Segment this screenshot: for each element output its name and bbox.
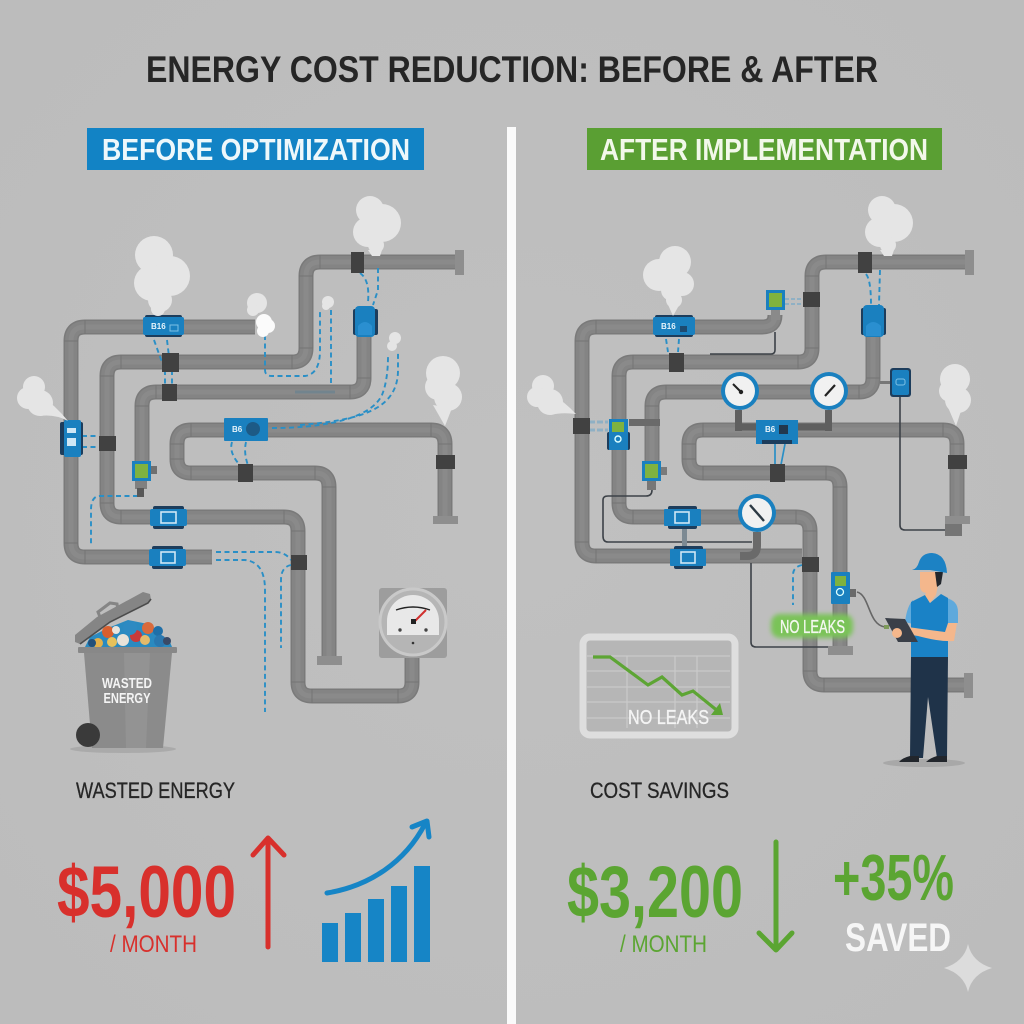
- stat: before cost: / MONTH: [110, 931, 197, 958]
- left sleeve: [905, 600, 913, 624]
- gauge: pressure one: [721, 372, 829, 431]
- leak stains and dashed leak lines: before: [82, 268, 398, 712]
- cables: after: [603, 332, 945, 647]
- meter: centre with dial: B6: [232, 425, 243, 434]
- smoke: before: [17, 196, 462, 426]
- head and neck: [920, 572, 938, 603]
- heading: after implementation: AFTER IMPLEMENTATION: [600, 133, 928, 167]
- hard hat: [912, 553, 947, 573]
- icon: sparkle: [944, 944, 992, 992]
- icon: gas meter high reading: [379, 588, 447, 658]
- icon: trash can of wasted energy: WASTED: [102, 675, 152, 692]
- connector between meters: [682, 529, 687, 546]
- line chart: falling cost: NO LEAKS: [628, 707, 709, 729]
- panel divider: [507, 127, 516, 1024]
- pipes: before: [64, 250, 464, 703]
- stat: percent saved: SAVED: [845, 916, 951, 960]
- dashed lines: after: [589, 270, 880, 605]
- label: wasted energy: WASTED ENERGY: [76, 778, 235, 803]
- callout: no leaks glow: NO LEAKS: [780, 617, 845, 637]
- arrow: cost down: [759, 842, 792, 950]
- meter: top blue: [143, 315, 184, 337]
- trash contents: [85, 620, 172, 648]
- torso: [911, 594, 948, 657]
- arrow: cost up: [253, 838, 284, 947]
- meter: middle: [150, 506, 187, 529]
- stat: percent saved: +35%: [833, 841, 954, 914]
- gauge: pressure two: [810, 372, 848, 431]
- title: ENERGY COST REDUCTION: BEFORE & AFTER: [146, 49, 878, 90]
- clamps: before: [99, 252, 455, 570]
- bar chart: rising cost: [322, 821, 430, 962]
- stat: after cost: / MONTH: [620, 931, 707, 958]
- stat: before cost: $5,000: [57, 852, 236, 933]
- trash lid: [75, 592, 151, 644]
- stat: after cost: $3,200: [567, 852, 743, 933]
- right sleeve: [945, 598, 958, 623]
- meter: controller: [756, 420, 798, 444]
- icon: trash can of wasted energy: [70, 592, 177, 753]
- icon: trash can of wasted energy: ENERGY: [104, 690, 150, 707]
- meter: centre with dial: [224, 418, 268, 441]
- meter: lower two: [670, 546, 706, 569]
- sensor: green top: [766, 290, 785, 320]
- callout: no leaks glow: [771, 614, 853, 638]
- device: left dual sensor: [607, 419, 660, 450]
- smoke: after: [527, 196, 971, 426]
- gauge: pressure three: [738, 494, 776, 556]
- tablet: [885, 618, 918, 642]
- device: blue box with cable: [880, 368, 911, 397]
- worker with tablet: [883, 553, 965, 767]
- clamps: after: [573, 252, 967, 572]
- meter: top blue: [653, 315, 695, 337]
- sensor: worker connected: [831, 572, 856, 604]
- meter: lower one: [664, 506, 701, 529]
- panel: after pipe network: [573, 250, 974, 698]
- trousers: [910, 657, 948, 758]
- pipes: after: [575, 250, 974, 698]
- arm and hand: [906, 623, 957, 641]
- valve: blue: [861, 305, 886, 337]
- sensor: green lower: [642, 461, 667, 490]
- meter: top blue: B16: [151, 322, 166, 331]
- stat: after cost: [567, 852, 743, 958]
- meter: top blue: B16: [661, 322, 676, 331]
- meter: bottom: [149, 546, 186, 569]
- heading: before optimization: BEFORE OPTIMIZATION: [102, 133, 410, 167]
- panel: before pipe network: [60, 250, 464, 712]
- meter: controller: B6: [765, 425, 776, 434]
- valve: blue: [353, 306, 378, 337]
- meter: left vertical: [60, 420, 83, 457]
- sensor: green: [132, 461, 157, 497]
- stat: before cost: [57, 852, 236, 958]
- line chart: falling cost: [583, 637, 735, 735]
- stat: percent saved: [833, 841, 954, 960]
- label: cost savings: COST SAVINGS: [590, 778, 729, 803]
